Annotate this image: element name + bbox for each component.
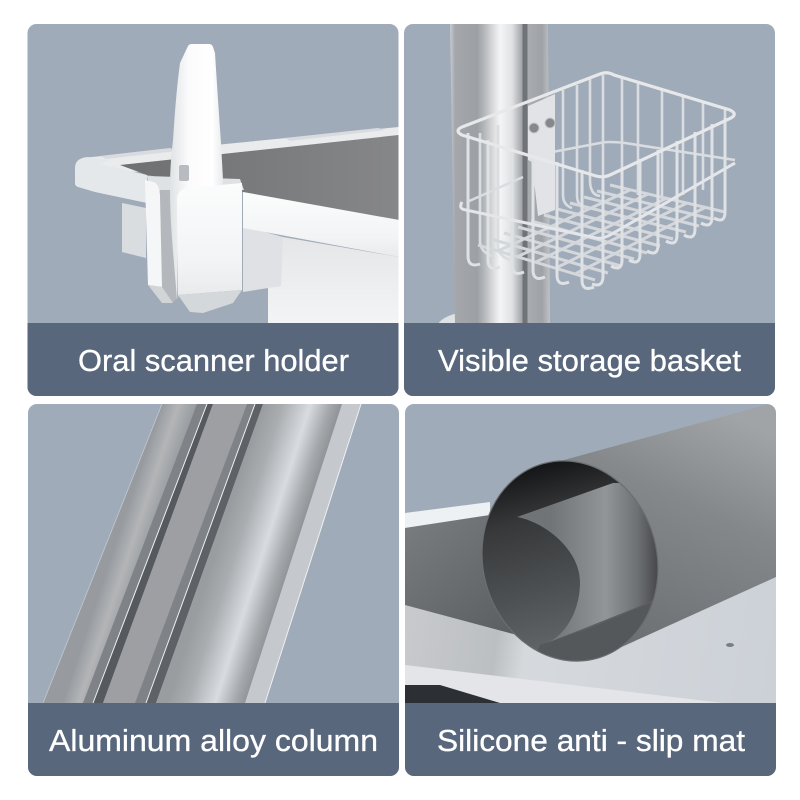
caption bar	[405, 703, 777, 776]
caption text: Visible storage basket	[438, 343, 741, 378]
icon: screws	[529, 118, 555, 133]
holder left piece	[145, 180, 173, 303]
basket top rim	[458, 73, 734, 177]
panel: oral scanner holder	[27, 24, 399, 396]
holder front piece	[177, 183, 242, 313]
screw hole	[726, 643, 734, 647]
caption text: Aluminum alloy column	[49, 723, 378, 758]
icon: oral scanner	[170, 44, 223, 300]
flat mat	[405, 515, 514, 634]
cabinet body under tray	[268, 237, 399, 323]
table surface	[405, 570, 776, 703]
lower mat sheet	[538, 610, 648, 660]
table rim	[405, 502, 490, 528]
basket back wires	[467, 75, 735, 260]
caption bar	[404, 323, 776, 396]
scanner gap shadow	[160, 190, 180, 303]
mounting plate	[528, 94, 555, 216]
aluminum column	[450, 24, 550, 323]
rolled mat body	[553, 405, 776, 650]
caption bar	[27, 323, 399, 396]
panel: aluminum alloy column	[28, 404, 400, 776]
holder back wall	[147, 176, 244, 192]
mounting bracket	[243, 226, 283, 292]
caption text: Silicone anti - slip mat	[437, 723, 745, 758]
basket front wires	[468, 118, 725, 288]
table front edge	[405, 665, 723, 703]
dark under-table shadow	[405, 685, 500, 703]
panel: silicone anti-slip mat	[405, 404, 777, 776]
basket middle rim	[461, 163, 735, 238]
panel: visible storage basket	[404, 24, 776, 396]
tray	[75, 127, 399, 257]
inner wall	[517, 483, 670, 643]
column profile	[43, 404, 361, 703]
caption bar	[28, 703, 400, 776]
roll opening	[482, 462, 658, 660]
base disc	[438, 314, 455, 323]
basket floor grid	[478, 185, 725, 280]
caption text: Oral scanner holder	[78, 343, 349, 378]
